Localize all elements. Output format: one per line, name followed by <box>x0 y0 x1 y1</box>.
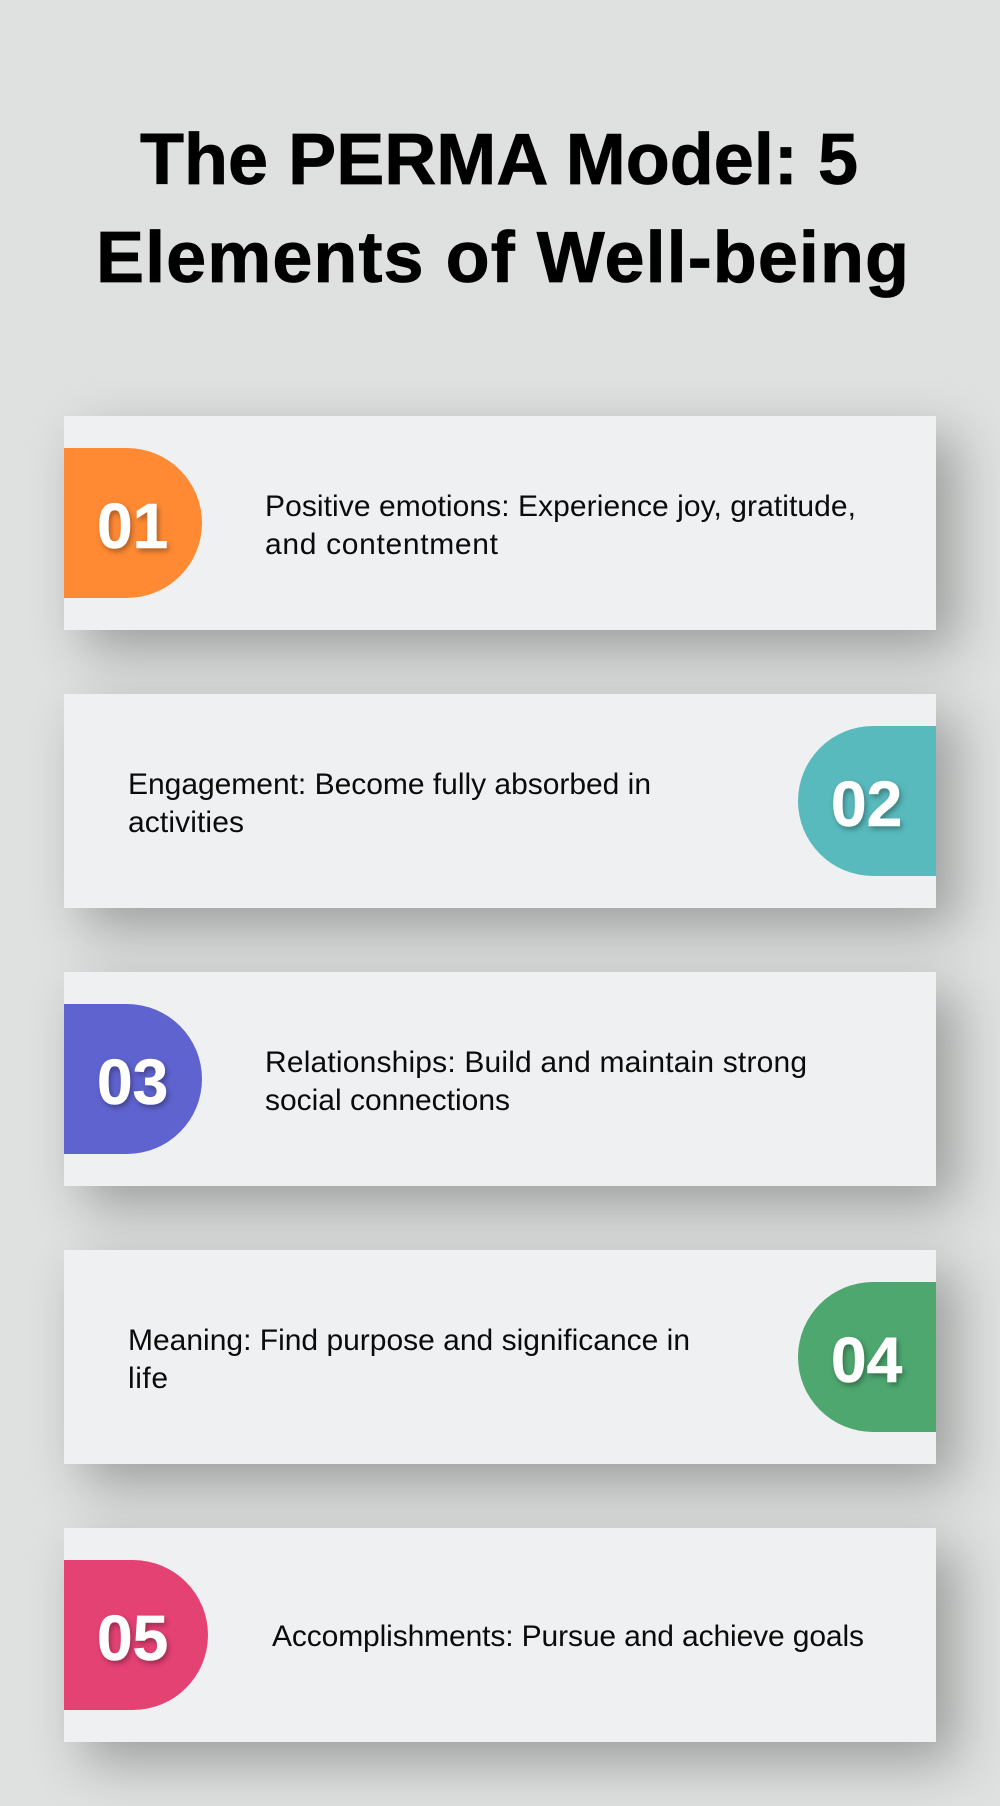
badge: 01 <box>64 448 202 598</box>
badge: 03 <box>64 1004 202 1154</box>
badge: 02 <box>798 726 936 876</box>
title <box>96 120 909 298</box>
text: engagement: Engagement: Become fully absorbed in <box>128 768 651 801</box>
title: The PERMA Model: 5 <box>140 120 858 200</box>
panel: 02 engagement <box>64 694 936 908</box>
text: positive emotions: Positive emotions: Experience joy, gratitude, <box>265 490 856 523</box>
panel: 01 positive emotions <box>64 416 936 630</box>
text: accomplishments: Accomplishments: Pursue and achieve goals <box>272 1620 864 1653</box>
panel: 04 meaning <box>64 1250 936 1464</box>
text: relationships <box>265 1046 807 1117</box>
badge: 05 <box>64 1560 208 1710</box>
text: meaning <box>128 1324 690 1395</box>
text: meaning: life <box>128 1362 168 1395</box>
text: engagement: activities <box>128 806 244 839</box>
badge: 02: 02 <box>831 768 902 840</box>
panel: 05 accomplishments <box>64 1528 936 1742</box>
title: Elements of Well-being <box>96 218 909 298</box>
badge: 04 <box>798 1282 936 1432</box>
text: meaning: Meaning: Find purpose and significance in <box>128 1324 690 1357</box>
text: relationships: Relationships: Build and maintain strong <box>265 1046 807 1079</box>
badge: 05: 05 <box>97 1602 168 1674</box>
text: engagement <box>128 768 651 839</box>
badge: 01: 01 <box>97 490 168 562</box>
badge: 03: 03 <box>97 1046 168 1118</box>
text: positive emotions: and contentment <box>265 528 499 561</box>
text: positive emotions <box>265 490 856 561</box>
text: relationships: social connections <box>265 1084 510 1117</box>
panel: 03 relationships <box>64 972 936 1186</box>
badge: 04: 04 <box>831 1324 902 1396</box>
